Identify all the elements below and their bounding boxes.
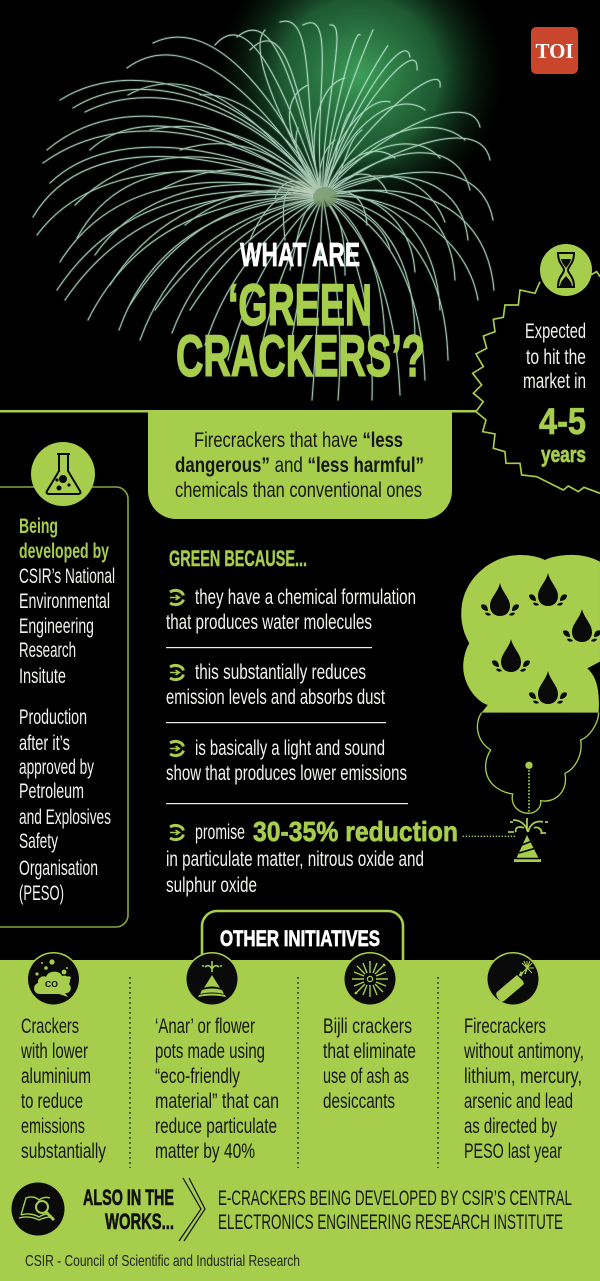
heading: green because: GREEN BECAUSE... [169,546,307,571]
text: production approval: Petroleum [19,780,84,803]
initiative: crackers with lower aluminium: Crackers [21,1015,79,1038]
text: production approval: Organisation [19,857,98,880]
text: expected to hit the market: years [541,442,586,467]
initiative: bijli crackers: that eliminate [323,1040,416,1063]
initiative: crackers with lower aluminium: substantially [21,1140,106,1163]
initiative: bijli crackers: desiccants [323,1090,395,1113]
tab: other initiatives: OTHER INITIATIVES [220,926,380,951]
reason 1: they have a chemical formulation [195,586,416,609]
text: also in the works [83,1185,174,1234]
reason 2 [166,661,385,709]
reason 3: is basically a light and sound [195,737,385,760]
title: ‘GREEN [228,273,372,338]
reason 4 [166,816,458,897]
initiative: crackers with lower aluminium: to reduce [21,1090,83,1113]
text: production approval: (PESO) [19,882,64,905]
text: being developed by: CSIR’s National [19,565,115,588]
icon: CO cloud: CO [45,980,58,989]
panel: definition: Firecrackers that have “less [194,429,403,452]
initiative: bijli crackers [323,1015,416,1113]
reason 3 [166,737,407,785]
text: production approval: after it’s [19,732,70,755]
text: being developed by: Research [19,639,76,662]
footnote: CSIR - Council of Scientific and Industrial Research [25,1253,300,1270]
reason 2: emission levels and absorbs dust [166,686,385,709]
text: being developed by [19,515,115,688]
icon: CO cloud [26,952,80,1006]
text: being developed by: developed by [19,540,109,563]
text: being developed by: Engineering [19,615,94,638]
text: production approval: approved by [19,756,94,779]
initiative: firecrackers without antimony [463,1015,584,1163]
icon: bijli burst [343,952,397,1006]
icon: hourglass [540,244,592,296]
reason 4: in particulate matter, nitrous oxide and [166,848,424,871]
photo: green firework [33,0,505,400]
list: reasons [166,586,458,897]
text: expected to hit the market: 4-5 [539,401,586,442]
text: production approval: Safety [19,830,58,853]
reason 4: promise [195,821,245,844]
reason 3: show that produces lower emissions [166,762,407,785]
reason 1: that produces water molecules [166,611,372,634]
initiative: anar flower pots: matter by 40% [155,1140,255,1163]
initiative: anar flower pots: “eco-friendly [155,1065,240,1088]
divider line [0,410,477,412]
tab: other initiatives [202,911,403,960]
initiative: crackers with lower aluminium: emissions [21,1115,85,1138]
icon: flask [31,442,95,506]
initiative: bijli crackers: use of ash as [323,1065,409,1088]
initiative: anar flower pots: material” that can [155,1090,279,1113]
initiative: crackers with lower aluminium: aluminium [21,1065,91,1088]
burst: market timeline [473,244,600,493]
text: production approval: and Explosives [19,806,111,829]
reason 2: this substantially reduces [195,661,366,684]
panel: definition: dangerous” and “less harmful” [175,454,424,477]
text: also in the works: WORKS... [105,1209,174,1234]
panel: who develops [0,442,128,927]
title: CRACKERS’? [176,324,425,389]
initiative: anar flower pots: pots made using [155,1040,265,1063]
text: e-crackers [218,1187,572,1234]
panel: other initiatives (green band) [0,960,600,1281]
dotted column dividers [130,977,438,1168]
text: production approval: Production [19,706,87,729]
initiative: crackers with lower aluminium: with lower [20,1040,88,1063]
initiative: anar flower pots: ‘Anar’ or flower [155,1015,255,1038]
title: WHAT ARE [240,236,360,273]
reason 4: sulphur oxide [166,874,257,897]
text: being developed by: Environmental [19,590,110,613]
initiative: bijli crackers: Bijli crackers [323,1015,412,1038]
initiative: anar flower pots [155,1015,279,1163]
text: being developed by: Insitute [19,665,66,688]
icon: anar flower pot [185,952,239,1006]
initiative: firecrackers without antimony: as directed by [464,1115,557,1138]
panel: definition [148,412,452,519]
logo: TOI: TOI [536,39,574,63]
text: also in the works: ALSO IN THE [83,1185,174,1210]
title [176,236,425,389]
reason 1 [166,586,416,634]
logo: TOI [531,27,578,74]
initiative: firecrackers without antimony: Firecrackers [464,1015,546,1038]
text: expected to hit the market [523,320,586,467]
initiative: anar flower pots: reduce particulate [155,1115,277,1138]
icon: flower pot cracker [508,818,548,862]
text: being developed by: Being [19,515,58,538]
initiative: crackers with lower aluminium [20,1015,106,1163]
reason 4: 30-35% reduction [253,816,458,847]
panel: definition: chemicals than conventional ones [175,479,422,502]
icon: dynamite [486,952,540,1006]
illustration: cloud with water drops [461,555,600,836]
text: production approval [19,706,111,905]
icon: double chevron [179,1178,205,1241]
icon: book and magnifier [12,1182,64,1236]
